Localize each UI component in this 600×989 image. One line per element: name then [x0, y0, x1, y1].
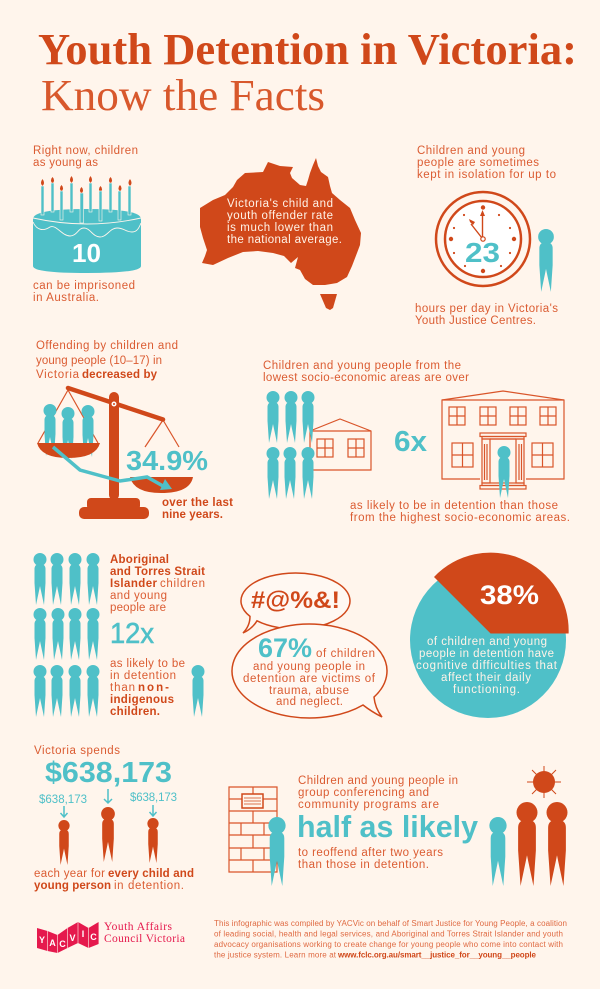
text: Aboriginal children: children: [160, 578, 205, 590]
text: each year: in detention.: [114, 880, 184, 892]
number: 6x: 6x: [394, 426, 427, 458]
text: offending decreased: decreased by: [82, 369, 158, 381]
icon: large building: [442, 391, 564, 490]
text: reoffend: [298, 847, 443, 871]
text: victims of trauma: trauma, abuse: [269, 685, 349, 697]
icon: single person: [192, 665, 204, 717]
text: as likely non-indigenous: as likely to be: [110, 658, 185, 670]
panel: birthday cake minimum age: [33, 145, 141, 304]
text: offending decreased: Offending by children and: [36, 340, 178, 352]
number: 23: 23: [465, 237, 500, 268]
text: Aboriginal children: Islander: [110, 578, 158, 590]
icon: folded banner: [37, 922, 99, 953]
icon: folded banner: C: [90, 932, 97, 942]
text: lowest socio-economic: [263, 360, 469, 384]
text: lowest socio-economic: lowest socio-economic areas are over: [263, 372, 469, 384]
text: victims of trauma: and young people in: [253, 661, 365, 673]
text: kept in isolation: kept in isolation for up to: [417, 169, 556, 181]
panel: Aboriginal and Torres Strait Islander children: [34, 553, 205, 718]
icon: folded banner: Y: [39, 935, 45, 945]
text: as likely non-indigenous: [110, 658, 185, 718]
number: half as likely: half as likely: [297, 809, 479, 844]
text: footer credits: advocacy organisations working to create change for young people who come into contact with: [214, 940, 563, 949]
title: [38, 25, 577, 120]
text: Aboriginal children: and young: [110, 590, 167, 602]
text: right now: [33, 145, 138, 169]
text: right now: as young as: [33, 157, 98, 169]
text: victims of trauma: detention are victims of: [243, 673, 376, 685]
text: reoffend: to reoffend after two years: [298, 847, 443, 859]
text: victims of trauma: of children: [316, 648, 375, 660]
text: over the last nine years: over the last: [162, 497, 233, 509]
icon: folded banner: C: [59, 939, 66, 949]
icon: family of people: [489, 802, 567, 886]
chart: pie: [410, 553, 569, 718]
number: 12x: 12x: [110, 618, 154, 650]
text: as likely: as likely to be in detention than those: [350, 500, 558, 512]
text: group conferencing: group conferencing and: [298, 787, 429, 799]
icon: six people: [266, 391, 314, 499]
text: kept in isolation: people are sometimes: [417, 157, 539, 169]
panel: offending decreased scales: [36, 340, 233, 521]
icon: sun: [527, 766, 561, 798]
text: offending decreased: Victoria: [36, 369, 80, 381]
text: can be imprisoned: [33, 280, 135, 304]
text: hours per day: hours per day in Victoria's: [415, 303, 558, 315]
number: 34.9%: 34.9%: [126, 445, 208, 476]
text: footer credits: [214, 919, 567, 960]
text: Aboriginal children: and Torres Strait: [110, 566, 205, 578]
text: offending decreased: [36, 340, 178, 381]
icon: folded banner: A: [49, 938, 56, 948]
icon: birthday cake: [33, 176, 141, 273]
text: Aboriginal children: [110, 554, 205, 614]
icon: person: [538, 229, 554, 292]
icon: twelve people: [34, 553, 100, 717]
text: group conferencing: Children and young people in: [298, 775, 458, 787]
number: 38%: 38%: [480, 580, 539, 610]
icon: folded banner: I: [82, 929, 84, 939]
panel: pie chart 38%: [410, 553, 569, 718]
text: each year: each year for: [34, 868, 105, 880]
text: group conferencing: [298, 775, 458, 811]
logo: YACVic: [37, 921, 185, 953]
panel: isolation clock: [415, 145, 558, 327]
icon: brick wall: [229, 787, 277, 872]
panel: socio-economic comparison: [263, 360, 570, 524]
icon: speech bubble swearing: [241, 573, 350, 633]
number: small $638,173 right: $638,173: [130, 792, 177, 804]
number: small $638,173 left: $638,173: [39, 794, 87, 806]
panel: half as likely: [229, 766, 567, 886]
arrows: down to each person: [60, 789, 156, 817]
icon: map of Australia: [200, 158, 361, 310]
text: cognitive difficulties: cognitive difficulties that: [416, 660, 558, 672]
text: as likely: from the highest socio-economic areas.: [350, 512, 570, 524]
number: $638,173: $638,173: [45, 757, 172, 789]
text: Aboriginal children: Aboriginal: [110, 554, 169, 566]
text: victims of trauma: [243, 648, 376, 708]
text: Aboriginal children: people are: [110, 602, 166, 614]
title: Youth Detention in Victoria:: [38, 25, 577, 74]
text: offender rate: Victoria's child and: [227, 198, 333, 210]
panel: cost per child: [34, 745, 194, 892]
icon: speech bubble swearing: #@%&!: [251, 587, 340, 614]
text: as likely non-indigenous: non-: [138, 682, 169, 694]
text: as likely: [350, 500, 570, 524]
text: offender rate: [227, 198, 342, 246]
text: as likely non-indigenous: than: [110, 682, 135, 694]
icon: speech bubble: [232, 624, 387, 718]
arrow: downward trend: [53, 447, 172, 490]
icon: clock: [436, 192, 530, 286]
text: hours per day: [415, 303, 558, 327]
number: 10: 10: [72, 238, 101, 268]
text: reoffend: than those in detention.: [298, 859, 429, 871]
text: logo name: Council Victoria: [104, 933, 185, 945]
text: cognitive difficulties: [416, 636, 558, 696]
text: cognitive difficulties: of children and young: [427, 636, 547, 648]
text: footer credits: the justice system. Learn more at: [214, 950, 337, 960]
text: over the last nine years: [162, 497, 233, 521]
icon: folded banner: V: [69, 933, 76, 943]
icon: small house: [310, 419, 371, 470]
panel: speech bubbles trauma: [232, 573, 387, 718]
text: offending decreased: young people (10–17) in: [36, 355, 162, 367]
text: as likely non-indigenous: children.: [110, 706, 160, 718]
text: can be imprisoned: can be imprisoned: [33, 280, 135, 292]
icon: person at wall: [268, 817, 286, 886]
text: right now: Right now, children: [33, 145, 138, 157]
text: group conferencing: community programs are: [298, 799, 439, 811]
text: as likely non-indigenous: indigenous: [110, 694, 174, 706]
icon: three people: [58, 807, 159, 865]
text: cognitive difficulties: functioning.: [453, 684, 520, 696]
text: hours per day: Youth Justice Centres.: [415, 315, 536, 327]
icon: balance scales: [37, 388, 193, 519]
text: cognitive difficulties: affect their daily: [441, 672, 531, 684]
text: can be imprisoned: in Australia.: [33, 292, 99, 304]
text: footer credits: www.fclc.org.au/smart__justice_for__young__people: [337, 950, 537, 960]
text: footer credits: This infographic was compiled by YACVic on behalf of Smart Justice for Young People, a coalition: [214, 919, 567, 928]
text: footer credits: of leading social, health and legal services, and Aboriginal and Torres Strait Islander and youth: [214, 930, 563, 938]
text: lowest socio-economic: Children and young people from the: [263, 360, 461, 372]
text: offender rate: youth offender rate: [227, 210, 333, 222]
text: as likely non-indigenous: in detention: [110, 670, 176, 682]
text: each year: every child and: [108, 868, 194, 880]
number: 67%: 67%: [258, 633, 312, 663]
text: over the last nine years: nine years.: [162, 509, 223, 521]
text: kept in isolation: [417, 145, 556, 181]
text: cognitive difficulties: people in detention have: [419, 648, 554, 660]
panel: Australia map: [200, 158, 361, 310]
text: each year: young person: [34, 880, 111, 892]
text: logo name: Youth Affairs: [104, 921, 173, 933]
title: Know the Facts: [41, 71, 325, 120]
text: each year: [34, 868, 194, 892]
text: logo name: [104, 921, 185, 945]
text: offender rate: the national average.: [227, 234, 342, 246]
text: Victoria spends: Victoria spends: [34, 745, 120, 757]
text: offender rate: is much lower than: [227, 222, 333, 234]
text: victims of trauma: and neglect.: [276, 696, 343, 708]
icon: person at door: [498, 446, 510, 498]
text: kept in isolation: Children and young: [417, 145, 525, 157]
